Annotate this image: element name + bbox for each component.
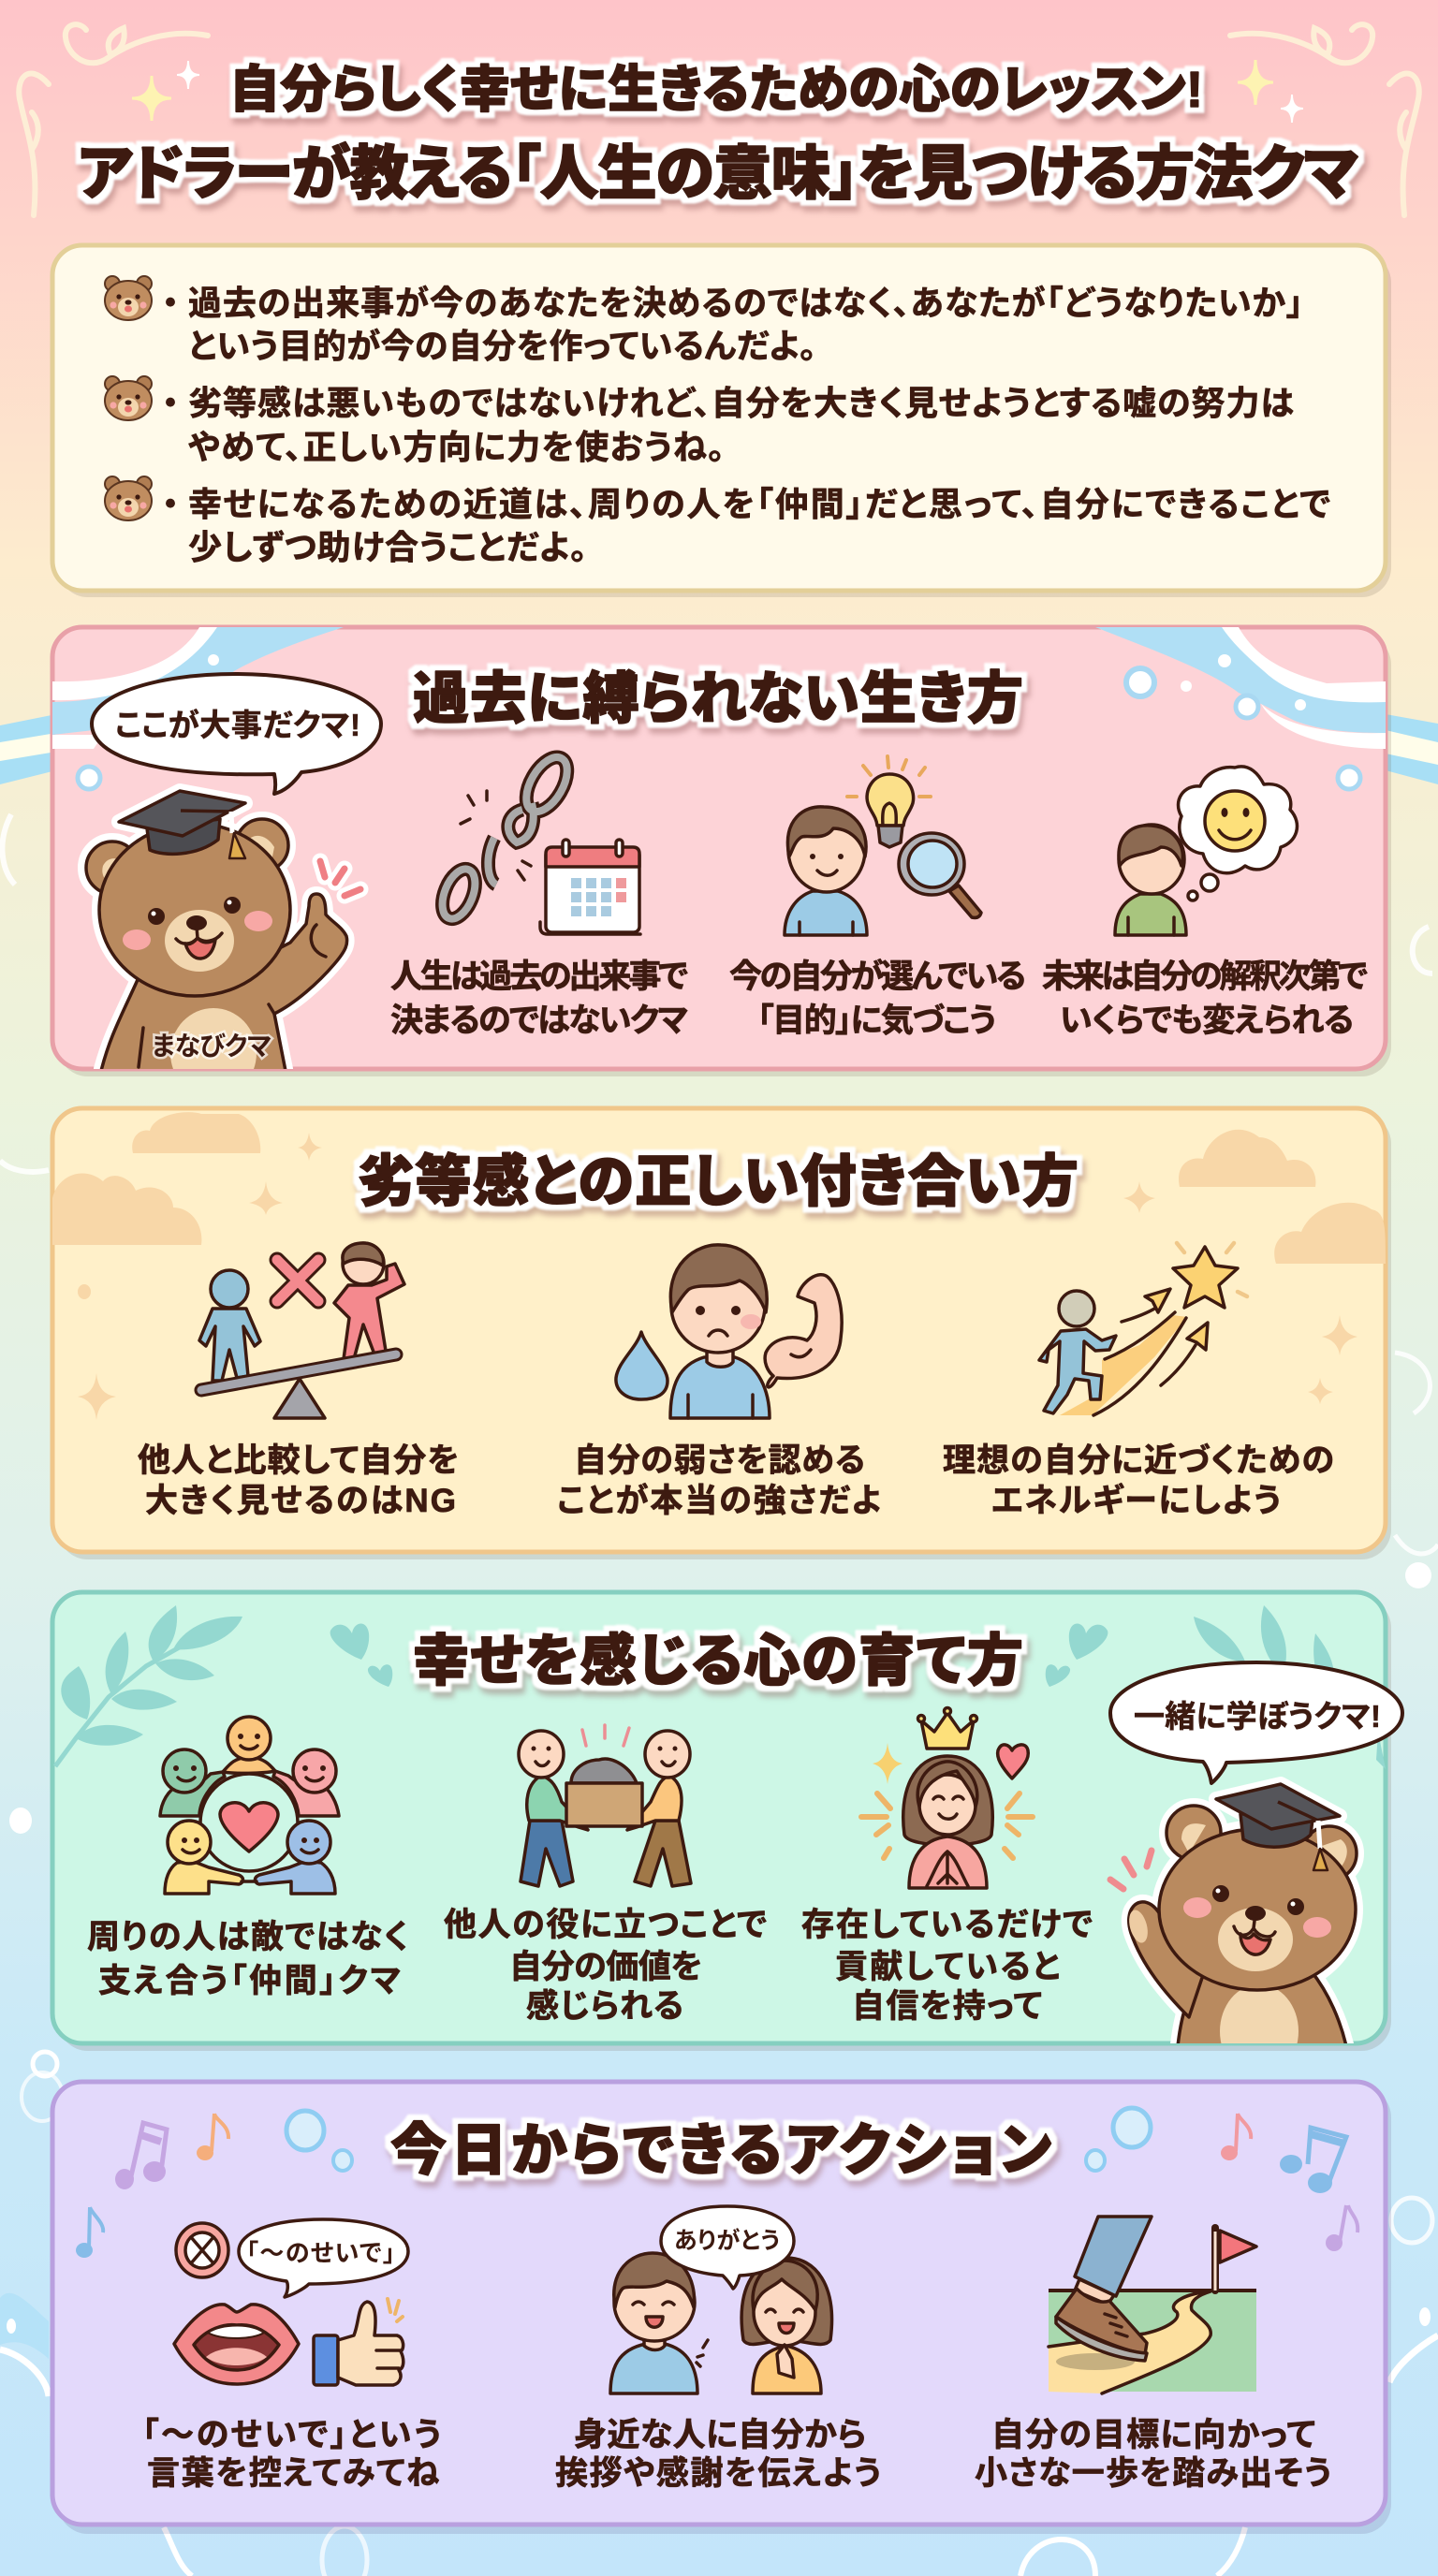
summary point 2: やめて、正しい方向に力を使おうね。: [188, 428, 725, 466]
background decoration: waves and bubbles: [0, 714, 1438, 2576]
caption: happiness 3: [801, 1907, 1093, 2025]
caption: inferiority 1: 大きく見せるのはNG: [145, 1483, 456, 1519]
summary point 1: 過去の出来事が今のあなたを決めるのではなく、あなたが「どうなりたいか」: [188, 284, 1303, 322]
heading: happiness: 幸せを感じる心の育て方: [413, 1630, 1023, 1692]
bear mascot: pointing: まなびクマ: [152, 1032, 271, 1061]
heading: past: 過去に縛られない生き方: [413, 667, 1023, 730]
caption: inferiority 3: 理想の自分に近づくための: [943, 1442, 1334, 1479]
icon: bear face 3: [105, 476, 152, 520]
caption: happiness 2: [444, 1907, 767, 2025]
caption: actions 1: 「〜のせいで」という: [142, 2417, 441, 2453]
heading: actions: 今日からできるアクション: [390, 2119, 1051, 2182]
summary point 1: という目的が今の自分を作っているんだよ。: [188, 327, 816, 365]
summary point 3: 少しずつ助け合うことだよ。: [188, 528, 587, 566]
caption: past 3: [1042, 959, 1368, 1039]
caption: inferiority 2: 自分の弱さを認める: [574, 1442, 865, 1479]
caption: actions 3: [975, 2417, 1331, 2492]
title: アドラーが教える「人生の意味」を見つける方法クマ: [78, 141, 1358, 207]
caption: inferiority 1: 他人と比較して自分を: [138, 1442, 459, 1479]
summary point 2: [162, 384, 1294, 466]
summary point 3: ・: [162, 485, 179, 523]
caption: happiness 2: 感じられる: [526, 1988, 683, 2025]
summary point 1: [162, 284, 1303, 365]
icon: people saying thanks: [610, 2206, 832, 2393]
caption: actions 3: 自分の目標に向かって: [991, 2417, 1315, 2453]
caption: actions 2: [555, 2417, 881, 2492]
icon: people saying thanks: ありがとう: [674, 2227, 780, 2254]
panel: past: [52, 627, 1391, 1098]
caption: inferiority 1: [138, 1442, 459, 1519]
decoration: title flourishes and sparkles: [19, 24, 1419, 215]
summary point 2: 劣等感は悪いものではないけれど、自分を大きく見せようとする嘘の努力は: [188, 384, 1294, 422]
caption: actions 3: 小さな一歩を踏み出そう: [975, 2455, 1331, 2492]
bear mascot: pointing: [85, 791, 360, 1098]
speech bubble: ここが大事だクマ: [92, 674, 381, 794]
caption: inferiority 3: エネルギーにしよう: [991, 1483, 1281, 1519]
bear mascot: waving: [1110, 1784, 1357, 2078]
summary point 2: ・: [162, 384, 179, 422]
summary point 3: 幸せになるための近道は、周りの人を「仲間」だと思って、自分にできることで: [188, 485, 1330, 523]
heading: inferiority: 劣等感との正しい付き合い方: [358, 1150, 1078, 1213]
caption: actions 2: 身近な人に自分から: [574, 2417, 866, 2453]
caption: actions 2: 挨拶や感謝を伝えよう: [555, 2455, 881, 2492]
caption: inferiority 2: ことが本当の強さだよ: [557, 1483, 881, 1519]
icon: running to star: [1039, 1243, 1247, 1415]
caption: happiness 2: 自分の価値を: [509, 1949, 702, 1985]
icon: seesaw comparison: [199, 1243, 404, 1418]
panel: happiness: [52, 1592, 1402, 2078]
panel: summary: [52, 245, 1391, 597]
icon: bear face 2: [105, 376, 152, 420]
icon: stepping toward goal: [1049, 2217, 1256, 2393]
icon: boy with light bulb and magnifier: [785, 756, 981, 935]
caption: actions 1: 言葉を控えてみてね: [147, 2455, 439, 2492]
title: [78, 62, 1358, 207]
caption: happiness 3: 存在しているだけで: [801, 1907, 1093, 1943]
panel: actions: [52, 2082, 1391, 2534]
icon: broken chain and calendar: [436, 751, 640, 934]
caption: past 1: 人生は過去の出来事で: [390, 959, 688, 995]
summary point 1: ・: [162, 284, 179, 322]
caption: past 3: いくらでも変えられる: [1060, 1003, 1354, 1039]
caption: past 2: 今の自分が選んでいる: [729, 959, 1026, 995]
caption: past 1: [390, 959, 688, 1039]
speech bubble: ここが大事だクマ: ここが大事だクマ!: [115, 708, 360, 742]
icon: accepting weakness: [616, 1245, 842, 1418]
icon: circle of friends: [160, 1717, 339, 1894]
caption: happiness 1: [87, 1919, 408, 1999]
caption: past 3: 未来は自分の解釈次第で: [1042, 959, 1368, 995]
caption: past 2: 「目的」に気づこう: [757, 1003, 996, 1039]
icon: bear face 1: [105, 276, 152, 320]
caption: happiness 1: 周りの人は敵ではなく: [87, 1919, 408, 1955]
caption: happiness 3: 自信を持って: [852, 1988, 1042, 2025]
speech bubble: 一緒に学ぼうクマ: [1110, 1662, 1402, 1783]
caption: happiness 2: 他人の役に立つことで: [444, 1907, 767, 1943]
icon: lips, thumbs up and forbidden phrase: 「〜のせいで」: [246, 2239, 395, 2267]
title: 自分らしく幸せに生きるための心のレッスン!: [229, 62, 1203, 118]
caption: past 1: 決まるのではないクマ: [390, 1003, 688, 1039]
panel: inferiority: [52, 1108, 1391, 1559]
caption: inferiority 2: [557, 1442, 881, 1519]
caption: happiness 3: 貢献していると: [835, 1949, 1060, 1985]
caption: past 2: [729, 959, 1026, 1039]
icon: lips, thumbs up and forbidden phrase: [174, 2219, 408, 2385]
icon: two people carrying a box: [519, 1725, 691, 1886]
caption: inferiority 3: [943, 1442, 1334, 1519]
caption: happiness 1: 支え合う「仲間」クマ: [98, 1963, 401, 1999]
icon: person imagining a smile: [1115, 767, 1297, 935]
caption: actions 1: [142, 2417, 441, 2492]
decoration: notes and bubbles: [76, 2108, 1357, 2258]
icon: woman with crown: [861, 1707, 1033, 1888]
summary point 3: [162, 485, 1330, 566]
speech bubble: 一緒に学ぼうクマ: 一緒に学ぼうクマ!: [1134, 1699, 1381, 1734]
